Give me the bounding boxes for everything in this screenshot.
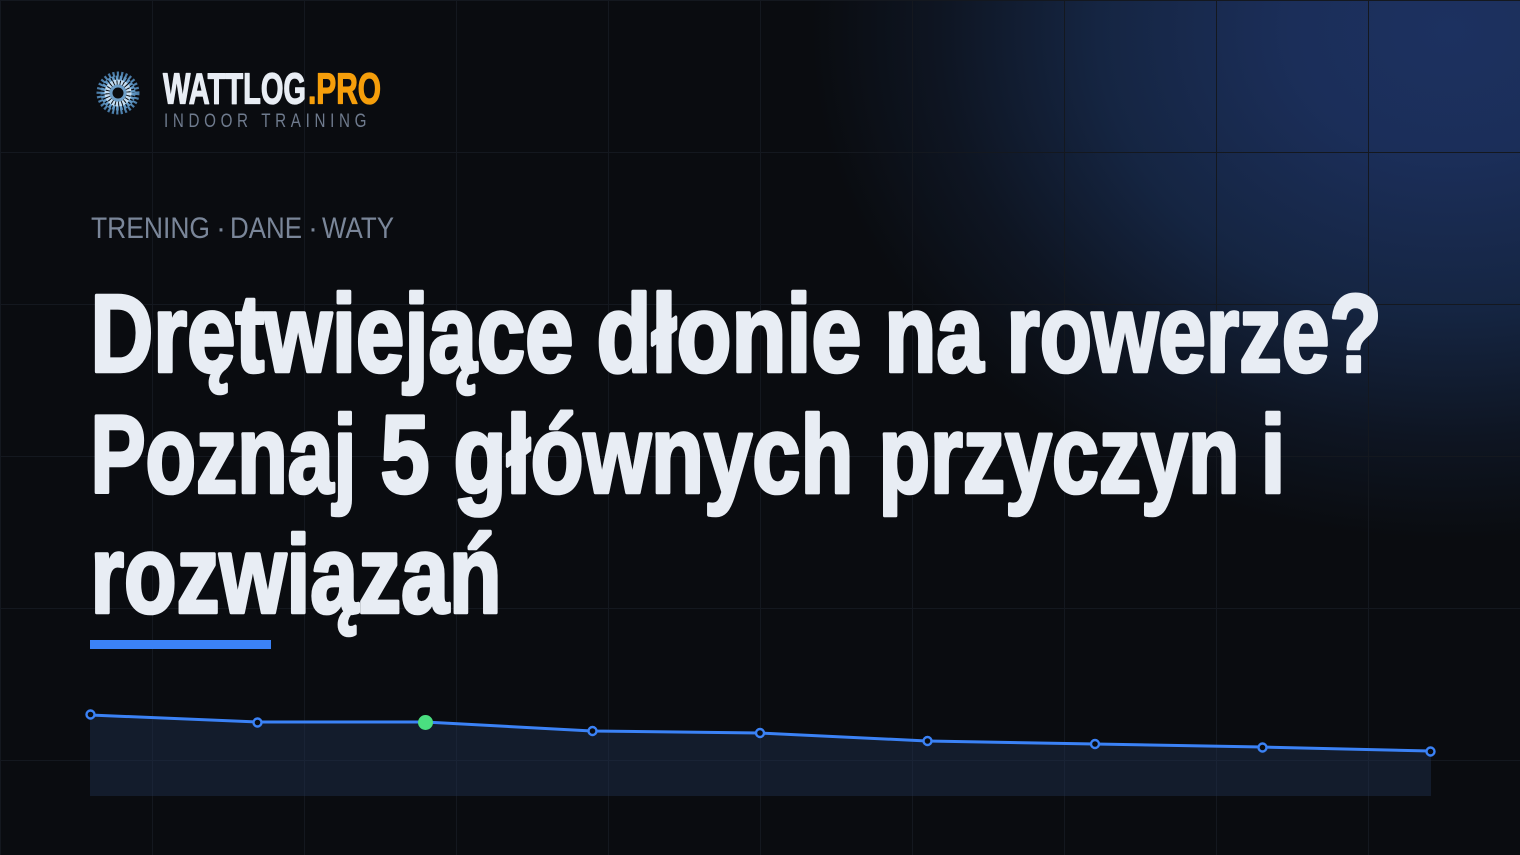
title: rowerze? [1006, 272, 1382, 396]
title: głównych [454, 394, 854, 516]
title: Poznaj [90, 394, 356, 516]
title: przyczyn [878, 394, 1240, 516]
icon: cassette cog [99, 74, 137, 112]
chart line [90, 715, 1430, 751]
title: dłonie [596, 272, 862, 396]
eyebrow: TRENING [91, 212, 210, 245]
title: i [1260, 394, 1286, 516]
data points [86, 710, 1434, 756]
highlighted point [418, 715, 433, 730]
brand name: WATTLOG [163, 64, 306, 114]
logo [99, 64, 381, 131]
title: rozwiązań [90, 514, 502, 636]
line chart [86, 710, 1434, 796]
brand tagline: INDOOR TRAINING [164, 109, 366, 131]
brand name: .PRO [308, 64, 381, 114]
chart area [90, 715, 1431, 796]
title: 5 [380, 394, 430, 516]
title [90, 272, 1382, 636]
eyebrow: · [216, 212, 226, 245]
title: na [884, 272, 984, 396]
eyebrow [91, 212, 394, 245]
eyebrow: WATY [322, 212, 394, 245]
eyebrow: · [308, 212, 318, 245]
title: Drętwiejące [90, 272, 574, 396]
eyebrow: DANE [230, 212, 302, 245]
accent underline [90, 640, 271, 649]
